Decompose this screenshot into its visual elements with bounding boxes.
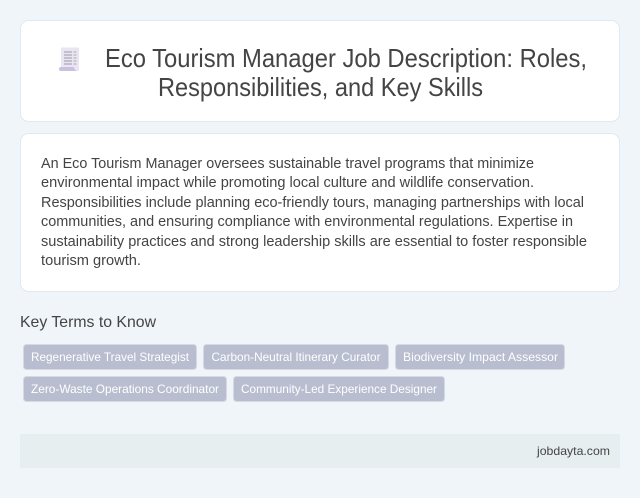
tag: community-led experience designer [234,376,444,402]
tag: carbon-neutral itinerary curator: Carbon-Neutral Itinerary Curator [212,350,380,364]
footer bar: jobdayta.com [536,444,610,458]
tag: community-led experience designer: Community-Led Experience Designer [241,382,437,396]
tag: regenerative travel strategist [24,344,196,370]
tag: zero-waste operations coordinator: Zero-Waste Operations Coordinator [31,382,219,396]
tag: zero-waste operations coordinator [24,376,226,402]
tag: regenerative travel strategist: Regenerative Travel Strategist [31,350,190,364]
tag: carbon-neutral itinerary curator [204,344,388,370]
description text: tourism growth. [41,253,141,269]
description text: sustainability practices and strong leadership skills are essential to foster responsible [41,234,587,250]
tag: biodiversity impact assessor [396,344,564,370]
heading: key terms: Key Terms to Know [20,314,156,331]
panel: title card [20,20,620,122]
description text: communities, and ensuring compliance with environmental regulations. Expertise in [41,214,573,230]
description text: Responsibilities include planning eco-friendly tours, managing partnerships with local [41,195,584,211]
description text [41,156,587,269]
description text: An Eco Tourism Manager oversees sustainable travel programs that minimize [41,156,534,172]
description text: environmental impact while promoting local culture and wildlife conservation. [41,175,534,191]
footer bar [20,434,620,468]
icon: document scroll [59,48,79,71]
title: Responsibilities, and Key Skills [158,74,483,102]
panel: description [20,134,620,292]
title: Eco Tourism Manager Job Description: Roles, [105,45,587,73]
tag: biodiversity impact assessor: Biodiversity Impact Assessor [403,350,558,364]
title [105,45,587,102]
